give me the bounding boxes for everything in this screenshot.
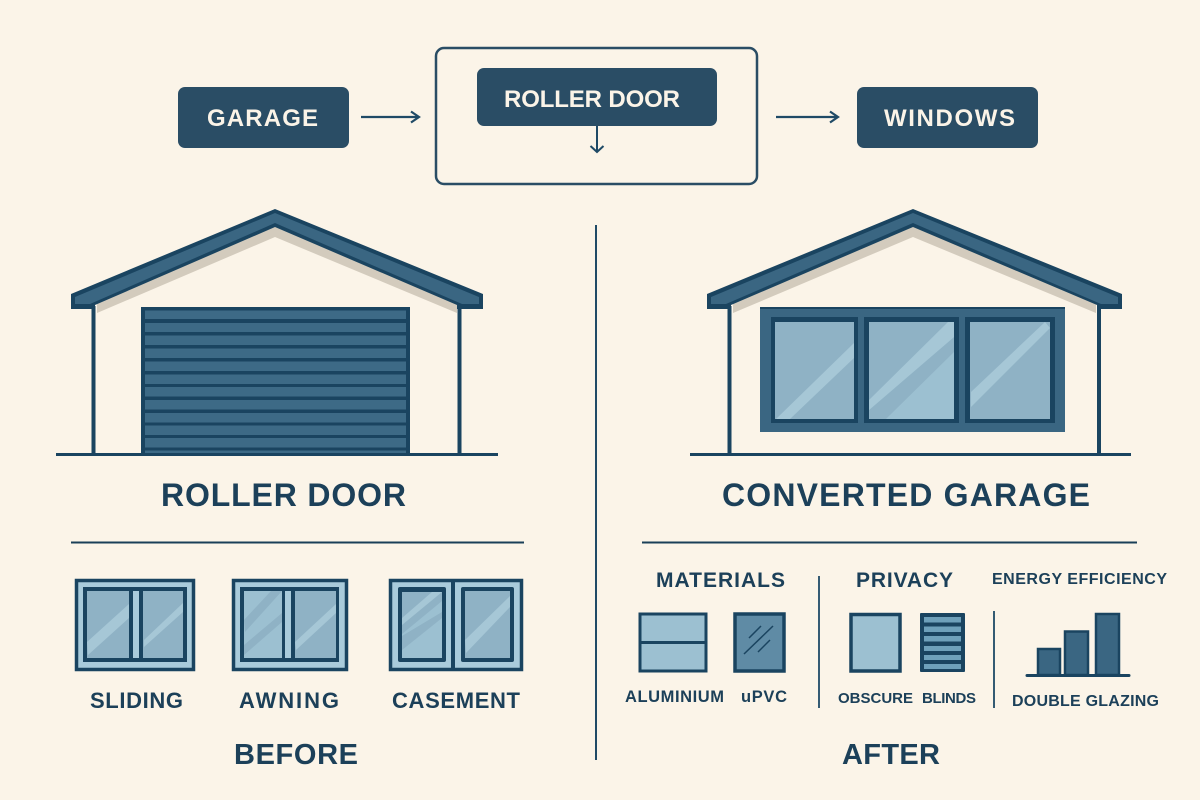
panel divider: after xyxy=(642,542,1137,544)
walls xyxy=(730,306,1099,455)
arrow: roller door to windows xyxy=(776,112,838,122)
roller door xyxy=(141,307,410,455)
box: garage: GARAGE xyxy=(207,105,318,132)
label: aluminium: ALUMINIUM xyxy=(625,688,724,706)
label: double glazing: DOUBLE GLAZING xyxy=(1012,693,1159,710)
heading: privacy: PRIVACY xyxy=(856,569,953,592)
large window xyxy=(760,307,1065,432)
walls xyxy=(94,306,460,455)
heading: after: AFTER xyxy=(842,739,940,771)
centre divider xyxy=(595,225,597,760)
heading: energy efficiency: ENERGY EFFICIENCY xyxy=(992,571,1167,588)
divider: privacy and energy xyxy=(993,611,995,708)
roof shadow xyxy=(97,226,457,313)
panel divider: before xyxy=(71,542,524,544)
box: windows xyxy=(857,87,1038,148)
frame: roller door xyxy=(436,48,757,184)
roof xyxy=(71,209,483,309)
icon: casement window xyxy=(390,580,522,670)
icon: upvc window xyxy=(735,614,784,671)
illustration: converted garage xyxy=(690,209,1131,455)
panel: before xyxy=(76,580,522,771)
label: upvc: uPVC xyxy=(741,688,787,706)
icon: awning window xyxy=(234,580,346,670)
chart: double glazing bars xyxy=(1027,614,1129,676)
ground line xyxy=(690,453,1131,456)
heading: materials: MATERIALS xyxy=(656,569,785,592)
label: casement: CASEMENT xyxy=(392,688,521,713)
box: garage xyxy=(178,87,349,148)
box: windows: WINDOWS xyxy=(884,105,1015,132)
icon: obscure glass xyxy=(851,614,900,671)
label: awning: AWNING xyxy=(239,688,339,713)
panel: after xyxy=(625,569,1167,771)
heading: before: BEFORE xyxy=(234,739,358,771)
flow diagram xyxy=(178,48,1038,184)
frame: roller door: ROLLER DOOR xyxy=(504,86,680,113)
heading: converted garage: CONVERTED GARAGE xyxy=(722,477,1090,513)
icon: blinds xyxy=(920,613,965,672)
roof xyxy=(707,209,1122,309)
illustration: garage with roller door xyxy=(56,209,498,455)
ground line xyxy=(56,453,498,456)
icon: aluminium window xyxy=(640,614,706,671)
divider: materials and privacy xyxy=(818,576,820,708)
label: obscure: OBSCURE xyxy=(838,690,913,707)
label: blinds: BLINDS xyxy=(922,690,976,707)
roof shadow xyxy=(733,226,1096,313)
icon: sliding window xyxy=(76,580,194,670)
heading: roller door: ROLLER DOOR xyxy=(161,477,406,513)
arrow: garage to roller door xyxy=(361,112,419,122)
label: sliding: SLIDING xyxy=(90,688,183,713)
